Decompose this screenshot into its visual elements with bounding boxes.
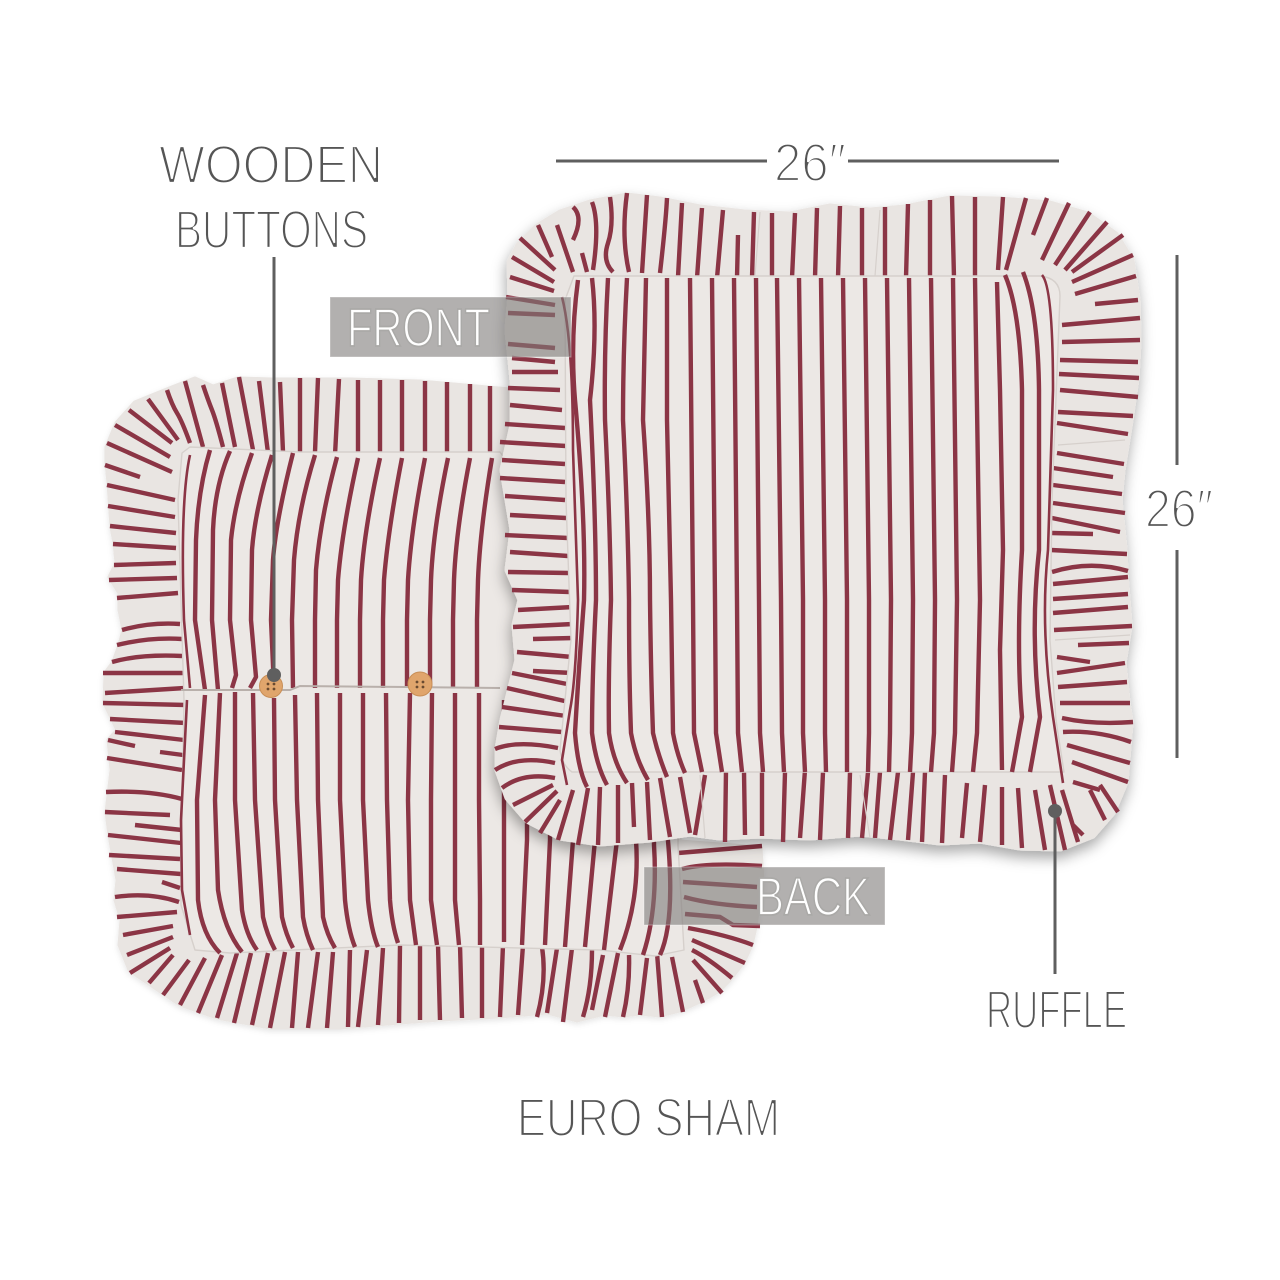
label: wooden buttons: WOODEN: [159, 135, 383, 195]
front panel stripes: [573, 272, 1040, 787]
width dimension 26 inches: 26″: [774, 133, 846, 193]
front pillow: [495, 193, 1140, 850]
label: ruffle: RUFFLE: [986, 980, 1127, 1040]
label: wooden buttons: BUTTONS: [175, 200, 368, 260]
pleats: [700, 210, 1130, 838]
back ruffle outline: [105, 379, 762, 1027]
front panel thin edge stripes: [562, 275, 1063, 785]
icon: wooden button left: [260, 674, 282, 698]
front ruffle stripes: [495, 193, 1140, 850]
label: back box: BACK: [756, 867, 870, 927]
back panel stripes: [195, 450, 670, 955]
front ruffle outline: [497, 195, 1139, 849]
height dimension 26 inches: 26″: [1145, 479, 1213, 539]
label: back box: [644, 867, 885, 927]
label: wooden buttons: [159, 135, 383, 260]
back panel thin edge stripe: [181, 455, 190, 935]
wooden buttons leader line: [267, 257, 281, 682]
back pillow: [103, 377, 762, 1028]
back panel: [178, 447, 684, 956]
caption: euro sham: EURO SHAM: [517, 1088, 780, 1148]
front panel: [560, 276, 1064, 772]
label: front box: FRONT: [347, 298, 490, 358]
back ruffle stripes: [103, 377, 762, 1028]
icon: wooden button right: [408, 672, 432, 696]
seam: [181, 686, 500, 690]
ruffle leader line: [1048, 804, 1062, 974]
